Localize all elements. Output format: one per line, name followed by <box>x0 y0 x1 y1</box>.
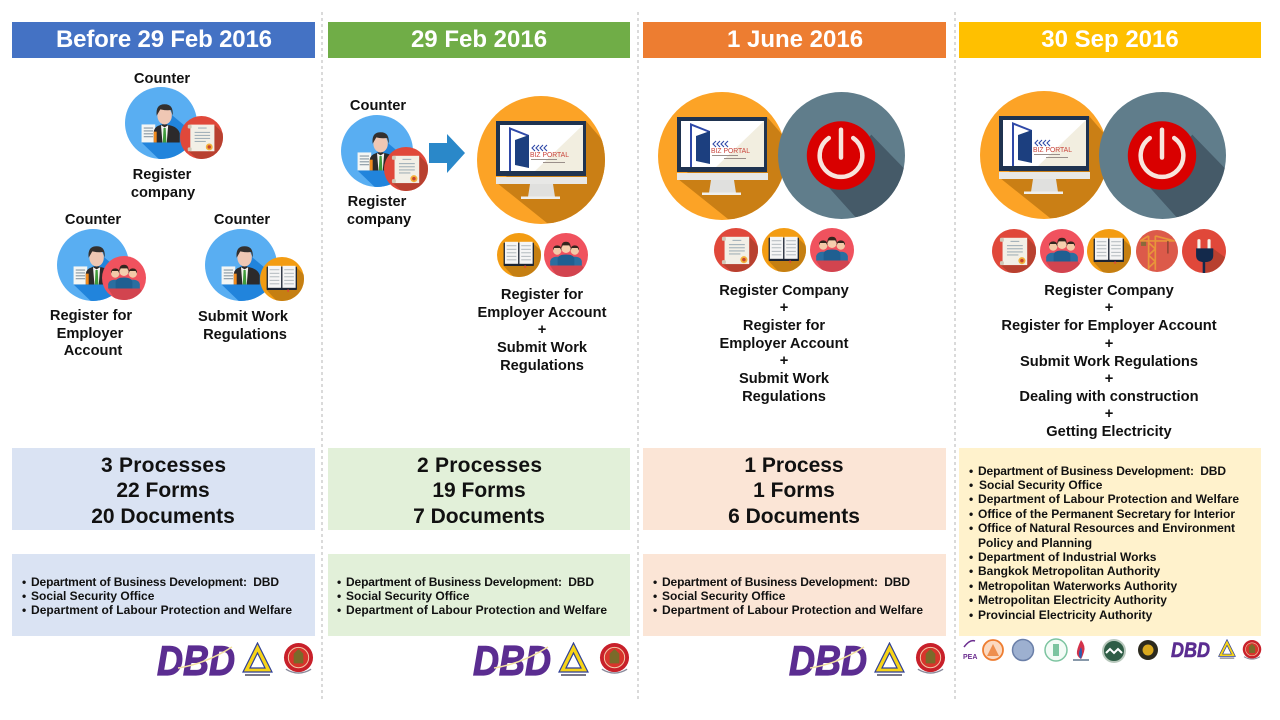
heading: 1 June 2016 <box>643 22 946 58</box>
stats: 2 processes: 19 Forms <box>432 479 526 502</box>
agency list: • <box>969 478 973 492</box>
agency list: Department of Business Development: DBD <box>31 575 279 589</box>
step description: Regulations <box>500 358 584 374</box>
stats: 3 processes: 3 Processes <box>101 454 226 477</box>
logos <box>473 637 629 684</box>
step description: Submit Work <box>739 371 830 387</box>
heading: 30 Sep 2016: 30 Sep 2016 <box>1041 26 1179 53</box>
agency list: Policy and Planning <box>978 536 1092 550</box>
agency list: • <box>969 579 973 593</box>
stats: 1 process <box>643 448 946 530</box>
step: counter register company <box>125 71 223 201</box>
step: counter register company: Counter <box>350 98 406 114</box>
agency list: • <box>653 575 657 589</box>
stats: 3 processes <box>12 448 315 530</box>
agency list: • <box>653 589 657 603</box>
logos <box>789 637 945 684</box>
step: counter register company: company <box>131 185 196 201</box>
step: counter register for employer account: Account <box>64 343 122 359</box>
heading: 29 Feb 2016 <box>328 22 630 58</box>
icon: BIZ Portal monitor <box>658 92 786 220</box>
step description: + <box>538 322 546 338</box>
stats: 3 processes: 20 Documents <box>91 505 235 528</box>
agency list: Social Security Office <box>346 589 470 603</box>
stats: 2 processes: 2 Processes <box>417 454 542 477</box>
column dividers <box>322 12 955 702</box>
heading: before 29 Feb 2016 <box>12 22 315 58</box>
agency list: Department of Business Development: DBD <box>346 575 594 589</box>
stats: 1 process: 1 Process <box>744 454 844 477</box>
step description: + <box>1105 371 1113 387</box>
agency list: Department of Labour Protection and Welfare <box>31 603 292 617</box>
step: counter register for employer account: Register for <box>50 308 132 324</box>
agency list <box>328 554 630 636</box>
agency list: • <box>653 603 657 617</box>
icon: BIZ Portal monitor: BIZ PORTAL <box>1033 145 1072 154</box>
step description: Employer Account <box>720 336 849 352</box>
step description: Register for <box>743 318 825 334</box>
agency list: Bangkok Metropolitan Authority <box>978 564 1161 578</box>
step: counter submit work regulations: Counter <box>214 212 270 228</box>
step description: Submit Work <box>497 340 588 356</box>
agency list: Department of Industrial Works <box>978 550 1157 564</box>
step description: Submit Work Regulations <box>1020 354 1198 370</box>
agency list: • <box>969 464 973 478</box>
agency list: • <box>337 603 341 617</box>
icon: power <box>1099 92 1238 221</box>
step description: + <box>1105 336 1113 352</box>
heading: 30 Sep 2016 <box>959 22 1261 58</box>
step: counter register company: company <box>347 212 412 228</box>
agency list: • <box>22 603 26 617</box>
step: counter submit work regulations: Regulations <box>203 327 287 343</box>
agency list: Provincial Electricity Authority <box>978 608 1153 622</box>
agency list: • <box>969 492 973 506</box>
step description: + <box>780 300 788 316</box>
agency list: • <box>969 564 973 578</box>
logos <box>157 637 313 684</box>
step description: Register for <box>501 287 583 303</box>
stats: 1 process: 6 Documents <box>728 505 860 528</box>
agency list: • <box>969 550 973 564</box>
step description: + <box>1105 300 1113 316</box>
agency list <box>12 554 315 636</box>
step description: Regulations <box>742 389 826 405</box>
step: counter register for employer account: Counter <box>65 212 121 228</box>
step description: Register Company <box>1044 283 1175 299</box>
agency list: Department of Labour Protection and Welfare <box>978 492 1239 506</box>
step: counter register company: Register <box>348 194 407 210</box>
icon: power <box>778 92 917 221</box>
logos: DBD <box>157 637 235 684</box>
panel: before 29 Feb 2016 <box>12 22 315 684</box>
step description: Employer Account <box>478 305 607 321</box>
agency list: Department of Labour Protection and Welfare <box>346 603 607 617</box>
logos: agencies: DBD <box>1171 639 1210 662</box>
agency list: Social Security Office <box>31 589 155 603</box>
step: counter register company: Register <box>133 167 192 183</box>
agency list <box>959 448 1261 636</box>
agency list: Department of Labour Protection and Welfare <box>662 603 923 617</box>
agency list: • <box>969 608 973 622</box>
logos: agencies <box>963 639 1261 662</box>
step description: Getting Electricity <box>1046 424 1173 440</box>
agency list: Metropolitan Electricity Authority <box>978 593 1167 607</box>
step: counter register company <box>341 98 428 228</box>
icon: BIZ Portal monitor <box>980 91 1108 219</box>
stats: 1 process: 1 Forms <box>753 479 835 502</box>
logos: DBD <box>789 637 867 684</box>
panel: 1 June 2016 <box>643 22 946 684</box>
agency list: Social Security Office <box>662 589 786 603</box>
step description: + <box>780 353 788 369</box>
agency list: • <box>22 575 26 589</box>
step description: Register for Employer Account <box>1001 318 1217 334</box>
icons: certificate, team, book, crane, plug <box>992 229 1226 273</box>
step description: Dealing with construction <box>1019 389 1199 405</box>
logos: DBD <box>473 637 551 684</box>
step: counter register company: Counter <box>134 71 190 87</box>
step: counter submit work regulations: Submit Work <box>198 309 289 325</box>
icon: BIZ Portal monitor <box>477 96 605 224</box>
agency list: Office of the Permanent Secretary for Interior <box>978 507 1235 521</box>
step: counter submit work regulations <box>198 212 304 343</box>
agency list: Department of Business Development: DBD <box>662 575 910 589</box>
panel: 29 Feb 2016 <box>328 22 630 684</box>
agency list: • <box>337 589 341 603</box>
stats: 3 processes: 22 Forms <box>116 479 210 502</box>
step description <box>478 287 607 374</box>
arrow <box>429 134 465 173</box>
icons: certificate, book, team <box>714 228 854 272</box>
icons: book and team <box>497 233 588 277</box>
agency list: • <box>969 593 973 607</box>
icon: BIZ Portal monitor: BIZ PORTAL <box>711 146 750 155</box>
step description <box>1001 283 1217 440</box>
step description <box>719 283 850 405</box>
stats: 2 processes <box>328 448 630 530</box>
agency list: • <box>22 589 26 603</box>
step: counter register for employer account <box>50 212 146 359</box>
agency list <box>643 554 946 636</box>
logos: agencies: PEA <box>963 654 977 661</box>
step: counter register for employer account: Employer <box>57 326 124 342</box>
agency list: • <box>969 521 973 535</box>
heading: before 29 Feb 2016: Before 29 Feb 2016 <box>56 26 272 53</box>
agency list: Social Security Office <box>979 478 1103 492</box>
stats: 2 processes: 7 Documents <box>413 505 545 528</box>
agency list: Metropolitan Waterworks Authority <box>978 579 1177 593</box>
panel: 30 Sep 2016 <box>959 22 1261 662</box>
agency list: • <box>969 507 973 521</box>
agency list: • <box>337 575 341 589</box>
agency list: Department of Business Development: DBD <box>978 464 1226 478</box>
heading: 29 Feb 2016: 29 Feb 2016 <box>411 26 547 53</box>
step description: Register Company <box>719 283 850 299</box>
agency list: Office of Natural Resources and Environment <box>978 521 1235 535</box>
heading: 1 June 2016: 1 June 2016 <box>727 26 863 53</box>
icon: BIZ Portal monitor: BIZ PORTAL <box>530 150 569 159</box>
step description: + <box>1105 406 1113 422</box>
